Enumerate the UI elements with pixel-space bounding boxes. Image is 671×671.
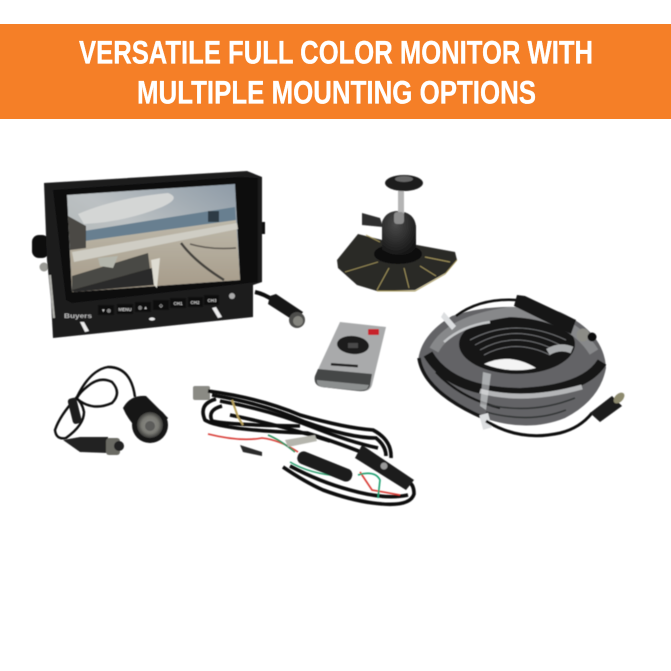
- camera lens: [132, 407, 168, 443]
- brand logo: Buyers: [64, 313, 92, 320]
- black strand band: [419, 354, 602, 418]
- remote power button: [368, 329, 379, 335]
- mount base: [337, 234, 457, 291]
- camera plug: [63, 437, 108, 453]
- remote d-pad: [336, 335, 370, 355]
- spade connector: [240, 445, 262, 456]
- ring terminal: [232, 400, 243, 425]
- monitor cable: [255, 292, 305, 328]
- wiring harness: [193, 386, 414, 504]
- mounting knob: [32, 222, 265, 272]
- lower grey bands: [480, 398, 575, 418]
- bracket and body: [44, 171, 262, 338]
- upper wrapped band: [434, 312, 594, 352]
- banner: [0, 24, 671, 119]
- top connector lead: [456, 300, 516, 316]
- bracket slots: [80, 307, 222, 332]
- bottom lead and connector: [486, 413, 592, 436]
- bracket arm highlight: [50, 275, 54, 318]
- thumb wheel: [385, 175, 423, 191]
- tape bands: [441, 312, 492, 430]
- monitor: [32, 171, 305, 338]
- control buttons: ▼ ◎: [101, 308, 112, 313]
- screen: [67, 184, 240, 292]
- control buttons: [98, 293, 235, 315]
- heading line 2: MULTIPLE MOUNTING OPTIONS: [137, 74, 536, 110]
- camera body: [123, 396, 168, 440]
- control buttons: CH1: [173, 301, 183, 306]
- mount collar: [374, 244, 422, 264]
- cable coil: [418, 295, 626, 436]
- centre gap: [484, 359, 536, 370]
- threaded end: [193, 386, 210, 400]
- hood inner: [53, 177, 258, 303]
- remote control: [315, 322, 386, 391]
- coloured wires: [208, 434, 400, 498]
- shiny band: [480, 387, 582, 396]
- inline switch: [355, 445, 414, 490]
- fuse holder: [295, 450, 354, 483]
- coil mass: [418, 307, 606, 426]
- control buttons: CH3: [207, 298, 217, 303]
- control buttons: ◇: [158, 303, 163, 308]
- steel stem: [398, 190, 404, 214]
- grey terminal: [285, 435, 317, 447]
- control buttons: CH2: [190, 300, 200, 305]
- inner windings: [459, 314, 575, 374]
- camera cable loop: [55, 367, 135, 438]
- side knob: [362, 213, 383, 227]
- control buttons: MENU: [118, 307, 132, 312]
- suction mount: [337, 175, 457, 291]
- cable inline module: [67, 397, 82, 425]
- top connector: [514, 295, 576, 334]
- camera: [55, 367, 168, 455]
- control buttons: ◎ ▲: [138, 305, 148, 310]
- ball joint: [382, 211, 416, 255]
- cable bundle: [203, 391, 414, 504]
- remote label: [331, 363, 358, 367]
